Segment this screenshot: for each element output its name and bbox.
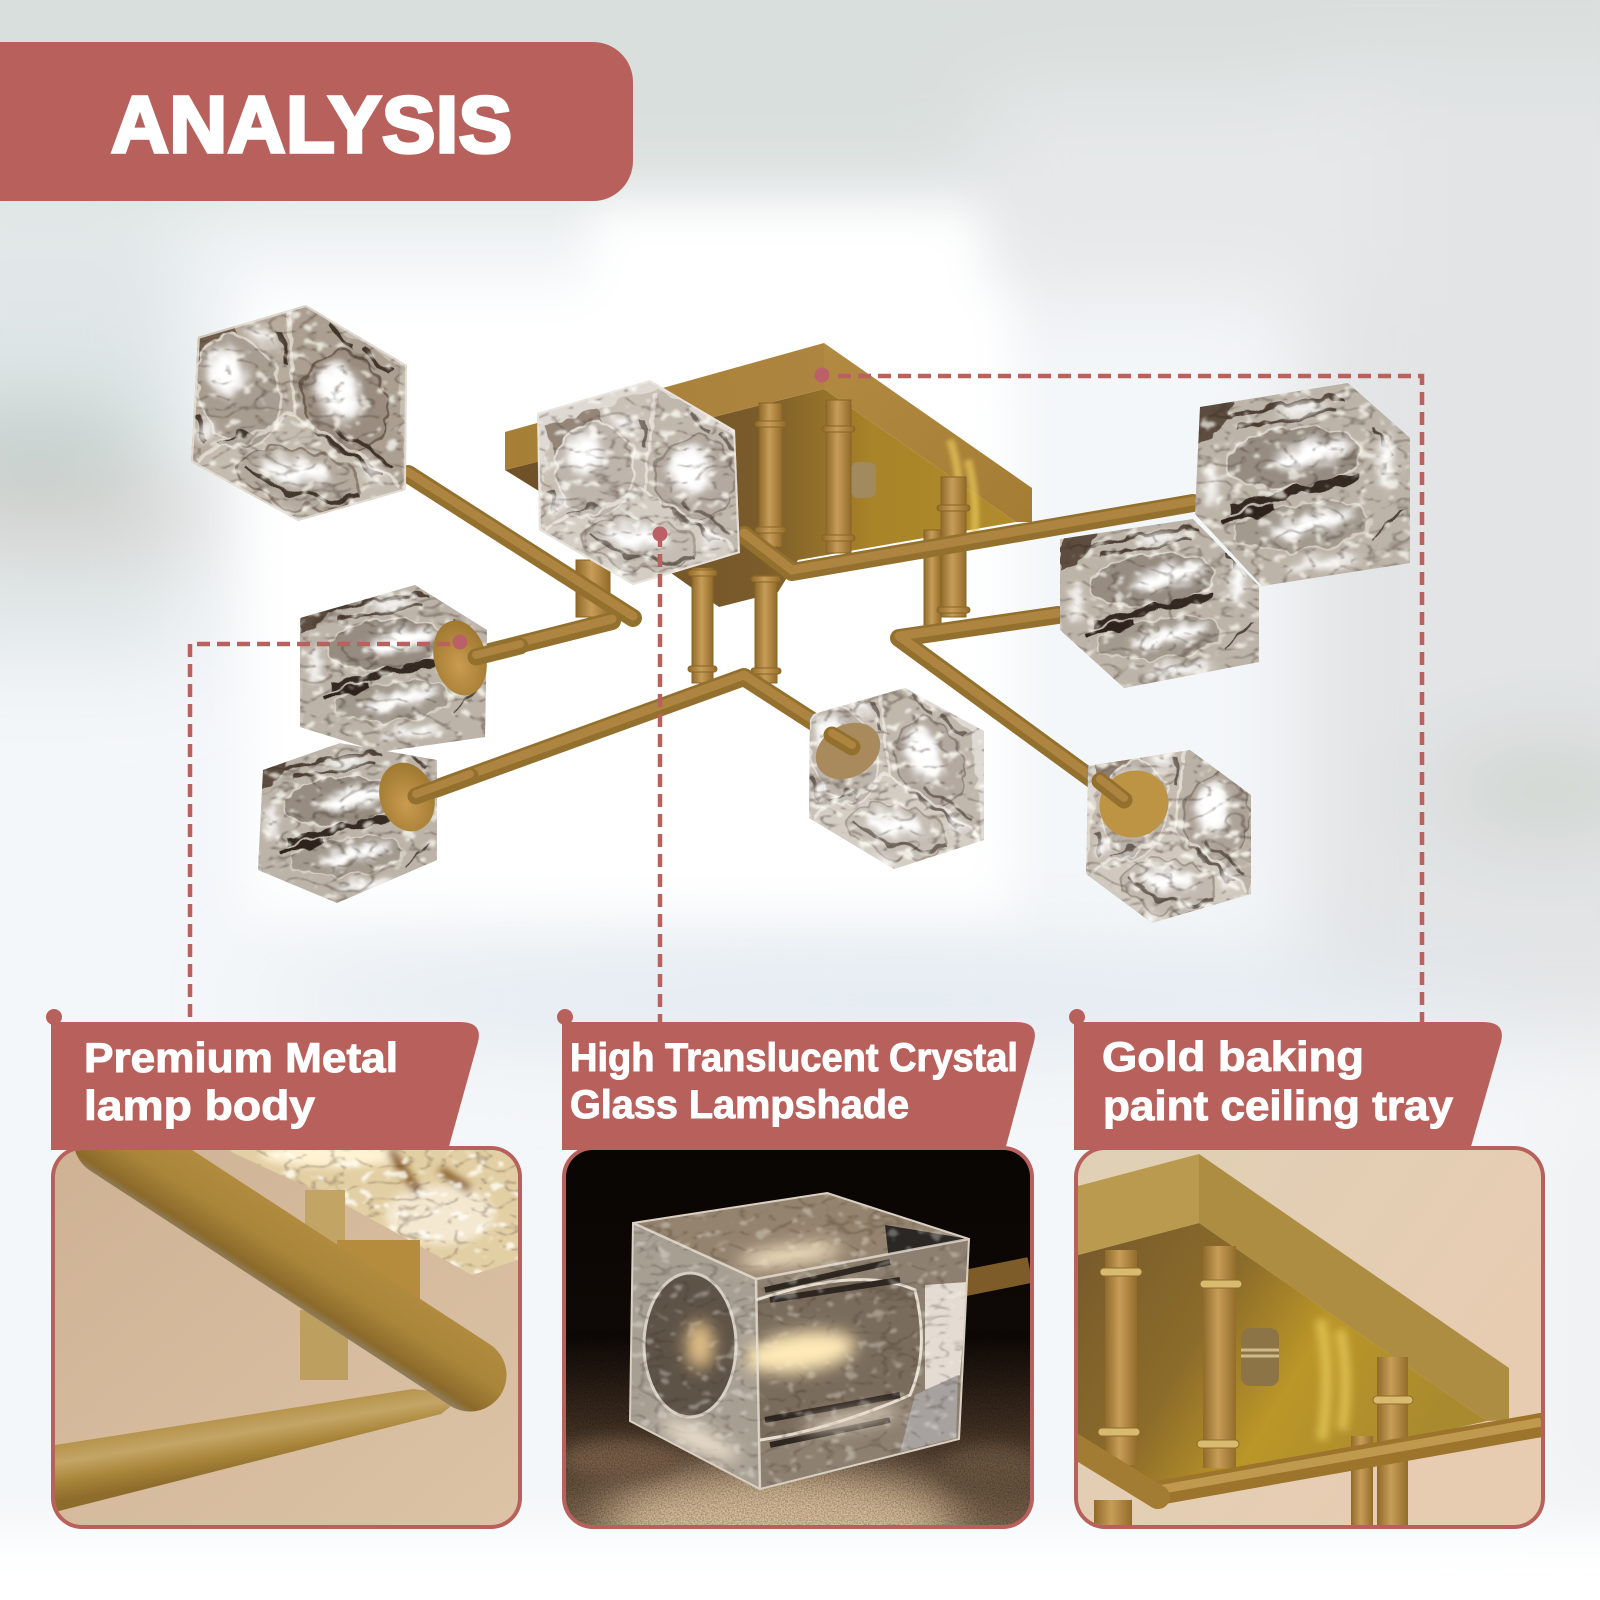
panel heading: High Translucent Crystal xyxy=(570,1036,1018,1080)
panel: crystal glass lampshade xyxy=(557,1009,1040,1580)
dashed connector: crystal shade xyxy=(652,526,668,1022)
panel tag xyxy=(51,1022,479,1150)
panel: gold baking paint ceiling tray xyxy=(1069,1009,1545,1530)
panel tag xyxy=(562,1022,1035,1150)
crystal shade: right middle xyxy=(1060,519,1259,688)
dashed connector: metal body xyxy=(190,634,468,1022)
panel heading: Glass Lampshade xyxy=(570,1083,909,1127)
panel heading: lamp body xyxy=(84,1082,316,1129)
support posts xyxy=(576,400,970,683)
panel frame xyxy=(1074,1146,1545,1529)
photo: ceiling tray xyxy=(1070,1150,1541,1530)
panel heading xyxy=(1102,1033,1454,1129)
ceiling tray xyxy=(505,343,1032,607)
crystal shade: left lower xyxy=(258,743,437,903)
panel heading xyxy=(570,1036,1018,1127)
tag dot xyxy=(1069,1009,1085,1025)
panel tag xyxy=(1074,1022,1502,1150)
panel frame xyxy=(51,1146,522,1529)
crystal shade: lower right xyxy=(1086,750,1251,923)
photo: metal arms xyxy=(55,1140,519,1525)
photo: crystal cube xyxy=(566,1150,1030,1525)
panel heading: Premium Metal xyxy=(84,1034,398,1081)
chandelier xyxy=(177,279,1415,948)
metal caps xyxy=(371,615,1181,850)
title banner xyxy=(0,42,633,201)
tag dot xyxy=(557,1009,573,1025)
panel heading xyxy=(84,1034,398,1129)
crystal shade: left middle xyxy=(300,585,487,751)
crystal shade: top right xyxy=(1195,383,1410,586)
title text: ANALYSIS xyxy=(111,80,512,169)
crystal shade: top left xyxy=(191,305,407,521)
dashed connector: ceiling tray xyxy=(814,368,1422,1022)
tag dot xyxy=(46,1009,62,1025)
panel: premium metal lamp body xyxy=(46,1009,522,1529)
panel heading: paint ceiling tray xyxy=(1103,1082,1454,1129)
crystal shade: lower centre xyxy=(809,688,984,869)
panel frame xyxy=(562,1146,1034,1529)
panel heading: Gold baking xyxy=(1102,1033,1364,1080)
arms xyxy=(408,472,1193,804)
crystal shade: centre xyxy=(537,380,740,585)
